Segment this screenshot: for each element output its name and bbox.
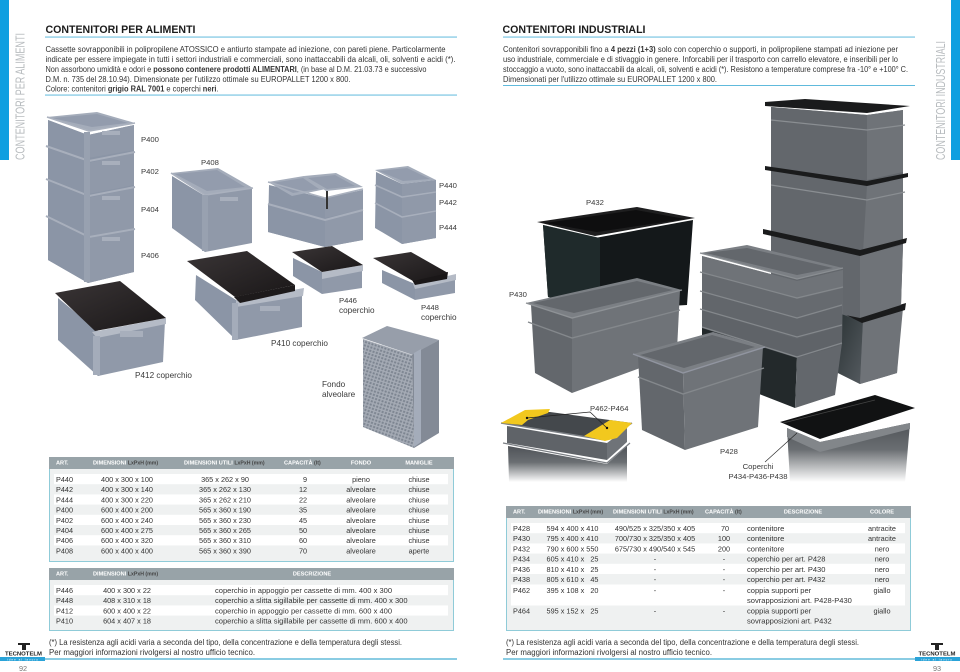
table: cassette: P442 xyxy=(56,485,73,494)
table: contenitori industriali: 594 x 400 x 410 xyxy=(547,524,598,533)
table: cassette: 9 xyxy=(303,475,307,484)
product labels: alimenti xyxy=(135,135,458,399)
table: cassette: 50 xyxy=(299,526,307,535)
intro text: alimenti: Cassette sovrapponibili in polipropilene ATOSSICO e antiurto stampate ad iniezione, con pareti piene. Particolarmente xyxy=(46,45,446,54)
product photo: P428 with black lid xyxy=(765,395,915,482)
table: cassette: DIMENSIONI LxPxH (mm) xyxy=(93,460,158,466)
product photo: P428 xyxy=(633,332,765,450)
table: cassette: alveolare xyxy=(346,516,376,525)
table: coperchi: 400 x 300 x 22 xyxy=(103,586,151,595)
side tab: right page xyxy=(933,0,960,160)
product photo: tall stack P432 with lids xyxy=(763,99,910,384)
table: cassette: 70 xyxy=(299,546,307,555)
product labels: alimenti: coperchio xyxy=(339,306,375,315)
table: cassette: MANIGLIE xyxy=(405,460,433,466)
product photo: P462-P464 yellow supports xyxy=(501,409,632,482)
table: contenitori industriali: giallo xyxy=(873,606,891,616)
intro text: alimenti: D.M. n. 735 del 28.10.94). Dimensionate per l'utilizzo ottimale su EUROPALLET 1200 x 800. xyxy=(46,75,350,84)
table: contenitori industriali: P430 xyxy=(513,534,530,543)
footnote: left page xyxy=(45,638,457,660)
table: contenitori industriali: - xyxy=(723,586,726,595)
product photo: P408 xyxy=(171,168,253,252)
table: contenitori industriali: contenitore xyxy=(747,534,784,543)
product labels: alimenti: P404 xyxy=(141,205,160,214)
table: cassette: 400 x 300 x 140 xyxy=(101,485,153,494)
table: contenitori industriali: COLORE xyxy=(870,510,894,516)
table: cassette: chiuse xyxy=(408,495,430,504)
table: contenitori industriali: nero xyxy=(875,555,889,564)
table: cassette: P402 xyxy=(56,516,73,525)
table: contenitori industriali: 200 xyxy=(718,544,730,553)
product labels: industriali: P462-P464 xyxy=(590,404,629,413)
table: coperchi: P410 xyxy=(56,617,73,626)
table: contenitori industriali: P438 xyxy=(513,575,530,584)
intro text: industriali: Contenitori sovrapponibili fino a 4 pezzi (1+3) solo con coperchio o supporti, in polipropilene stampati ad iniezione per xyxy=(503,45,898,54)
table: cassette xyxy=(49,457,454,562)
intro text: alimenti: Colore: contenitori grigio RAL 7001 e coperchi neri. xyxy=(46,84,218,94)
table: contenitori industriali: coppia supporti per xyxy=(747,586,812,595)
product photo: P410 with lid xyxy=(187,251,304,340)
table: coperchi: ART. xyxy=(56,572,69,578)
table: cassette: alveolare xyxy=(346,485,376,494)
table: contenitori industriali: P428 xyxy=(513,524,530,533)
side tab: left page xyxy=(0,0,28,160)
table: coperchi: 408 x 310 x 18 xyxy=(103,596,151,605)
product labels: alimenti: P400 xyxy=(141,135,159,144)
table: contenitori industriali: coperchio per art. P432 xyxy=(747,575,825,584)
logo: left page: TECNOTELM xyxy=(5,652,43,658)
table: contenitori industriali: P434 xyxy=(513,555,530,564)
table: cassette: 565 x 360 x 390 xyxy=(199,546,251,555)
product labels: alimenti: P446 xyxy=(339,296,357,305)
table: cassette: 45 xyxy=(299,516,307,525)
product photo: stack P440-P444 xyxy=(375,166,436,244)
table: contenitori industriali: - xyxy=(723,555,726,564)
table: cassette: DIMENSIONI UTILI LxPxH (mm) xyxy=(184,460,265,466)
product labels: alimenti: P402 xyxy=(141,167,159,176)
table: cassette: FONDO xyxy=(351,460,372,466)
product labels: alimenti: P444 xyxy=(439,223,458,232)
table: cassette: P444 xyxy=(56,495,73,504)
table: contenitori industriali: nero xyxy=(875,575,889,584)
table: contenitori industriali: DIMENSIONI LxPxH (mm) xyxy=(538,510,603,516)
table: contenitori industriali: 810 x 410 x 25 xyxy=(547,565,598,574)
table: coperchi: 604 x 407 x 18 xyxy=(103,617,151,626)
logo: right page: TECNOTELM xyxy=(918,652,956,658)
table: cassette: 565 x 360 x 190 xyxy=(199,506,251,515)
product labels: industriali: P428 xyxy=(720,447,738,456)
table: cassette: P406 xyxy=(56,536,73,545)
table: cassette: P440 xyxy=(56,475,73,484)
table: cassette: 600 x 400 x 320 xyxy=(101,536,153,545)
table: contenitori industriali: P436 xyxy=(513,565,530,574)
product photo: P430 xyxy=(526,278,682,393)
table: cassette: P404 xyxy=(56,526,73,535)
footnote: left page: (*) La resistenza agli acidi varia a seconda del tipo, della concentrazione e della temperatura degli stessi. xyxy=(49,638,402,647)
table: contenitori industriali: ART. xyxy=(513,510,526,516)
product photo: stack P428-P430 grey xyxy=(700,245,843,408)
product photo: P446 with lid xyxy=(292,246,363,294)
intro text: industriali: uso industriale, commerciale e di stivaggio in genere. Inforcabili per il trasporto con carrello elevatore, e inseribili per lo xyxy=(503,55,899,64)
logo: right page xyxy=(915,643,960,661)
table: coperchi: DESCRIZIONE xyxy=(293,572,331,578)
table: cassette: pieno xyxy=(352,475,370,484)
table: cassette: alveolare xyxy=(346,506,376,515)
table: cassette: chiuse xyxy=(408,536,430,545)
product labels: alimenti: alveolare xyxy=(322,390,356,399)
table: contenitori industriali: 595 x 152 x 25 xyxy=(547,606,598,616)
product labels: industriali: P430 xyxy=(509,290,527,299)
intro text: industriali xyxy=(503,37,915,86)
table: contenitori industriali: giallo xyxy=(873,586,891,595)
table: cassette: P408 xyxy=(56,546,73,555)
table: contenitori industriali: 490/525 x 325/350 x 405 xyxy=(615,524,695,533)
table: contenitori industriali: coperchio per art. P428 xyxy=(747,555,825,564)
table: cassette: 565 x 360 x 310 xyxy=(199,536,251,545)
product photo: P432 black xyxy=(537,207,695,310)
footnote: left page: Per maggiori informazioni rivolgersi al nostro ufficio tecnico. xyxy=(49,648,255,657)
table: coperchi: P448 xyxy=(56,596,73,605)
product photo: P448 with lid xyxy=(373,252,456,300)
table: contenitori industriali: antracite xyxy=(868,524,896,533)
table: cassette: alveolare xyxy=(346,495,376,504)
product labels: alimenti: P442 xyxy=(439,198,457,207)
table: contenitori industriali: sovrapposizioni art. P428-P430 xyxy=(747,596,852,605)
logo: left page: idee al lavoro xyxy=(7,657,39,661)
intro text: alimenti xyxy=(45,37,457,96)
table: contenitori industriali: P462 xyxy=(513,586,530,595)
table: coperchi: P412 xyxy=(56,606,73,615)
product labels: alimenti: P410 coperchio xyxy=(271,339,328,348)
logo: left page xyxy=(0,643,45,661)
footnote: right page xyxy=(503,638,915,660)
table: cassette: alveolare xyxy=(346,536,376,545)
table: cassette: alveolare xyxy=(346,546,376,555)
table: cassette: 600 x 400 x 240 xyxy=(101,516,153,525)
table: cassette: 22 xyxy=(299,495,307,504)
table: contenitori industriali: DIMENSIONI UTILI LxPxH (mm) xyxy=(613,510,694,516)
table: contenitori industriali: contenitore xyxy=(747,524,784,533)
table: coperchi: coperchio in appoggio per cassette di mm. 400 x 300 xyxy=(215,586,392,595)
product labels: alimenti: P408 xyxy=(201,158,219,167)
table: contenitori industriali: - xyxy=(654,555,657,564)
heading: contenitori industriali: CONTENITORI INDUSTRIALI xyxy=(502,24,646,36)
table: cassette: 600 x 400 x 200 xyxy=(101,506,153,515)
table: contenitori industriali: coppia supporti per xyxy=(747,606,812,616)
product labels: industriali: Coperchi xyxy=(743,462,774,471)
product photo: P410 base with half-size boxes xyxy=(268,173,363,247)
table: contenitori industriali: 675/730 x 490/540 x 545 xyxy=(615,544,695,553)
table: contenitori industriali: 700/730 x 325/350 x 405 xyxy=(615,534,695,543)
table: contenitori industriali: nero xyxy=(875,565,889,574)
table: cassette: P400 xyxy=(56,506,73,515)
table: cassette: 565 x 360 x 230 xyxy=(199,516,251,525)
heading: contenitori per alimenti: CONTENITORI PER ALIMENTI xyxy=(46,24,196,36)
table: contenitori industriali: - xyxy=(654,586,657,595)
table: contenitori industriali: 805 x 610 x 45 xyxy=(547,575,598,584)
intro text: industriali: stoccaggio a vuoto, sono inattaccabili da alcali, oli, solventi e acidi (*). Resistono a temperature comprese fra -10° e +100° C. xyxy=(503,65,908,74)
footnote: right page: (*) La resistenza agli acidi varia a seconda del tipo, della concentrazione e della temperatura degli stessi. xyxy=(506,638,859,647)
product labels: alimenti: Fondo xyxy=(322,380,346,389)
table: contenitori industriali: CAPACITÀ (lt) xyxy=(705,508,742,516)
table: contenitori industriali: contenitore xyxy=(747,544,784,553)
table: cassette: 400 x 300 x 100 xyxy=(101,475,153,484)
product photo: fondo alveolare xyxy=(362,326,439,448)
table: cassette: chiuse xyxy=(408,485,430,494)
table: contenitori industriali: coperchio per art. P430 xyxy=(747,565,825,574)
footnote: right page: Per maggiori informazioni rivolgersi al nostro ufficio tecnico. xyxy=(506,648,712,657)
product labels: industriali: P434-P436-P438 xyxy=(729,472,787,481)
table: contenitori industriali: 395 x 108 x 20 xyxy=(547,586,598,595)
table: cassette: 60 xyxy=(299,536,307,545)
table: coperchi: DIMENSIONI LxPxH (mm) xyxy=(93,572,158,578)
table: coperchi: 600 x 400 x 22 xyxy=(103,606,151,615)
table: contenitori industriali: antracite xyxy=(868,534,896,543)
product labels: alimenti: P412 coperchio xyxy=(135,371,192,380)
table: cassette: chiuse xyxy=(408,506,430,515)
product labels: alimenti: P440 xyxy=(439,181,457,190)
table: contenitori industriali: DESCRIZIONE xyxy=(784,510,822,516)
table: contenitori industriali: sovrapposizioni art. P432 xyxy=(747,616,832,626)
table: cassette: 400 x 300 x 220 xyxy=(101,495,153,504)
table: contenitori industriali: - xyxy=(654,606,657,616)
intro text: industriali: Dimensionati per l'utilizzo ottimale su EUROPALLET 1200 x 800. xyxy=(503,75,717,84)
product labels: industriali: P432 xyxy=(586,198,604,207)
table: contenitori industriali: - xyxy=(723,575,726,584)
table: contenitori industriali: - xyxy=(654,565,657,574)
table: cassette: 600 x 400 x 400 xyxy=(101,546,153,555)
intro text: alimenti: indicate per essere impiegate in tutti i settori industriali e commerciali, sono inattaccabili da alcali, oli, solventi e acidi (*). xyxy=(46,55,456,64)
product photo: stack P400-P406 xyxy=(46,112,135,283)
product labels: alimenti: P406 xyxy=(141,251,159,260)
table: cassette: 365 x 262 x 130 xyxy=(199,485,251,494)
table: contenitori industriali: 795 x 400 x 410 xyxy=(547,534,598,543)
table: contenitori industriali: P464 xyxy=(513,606,530,616)
table: cassette: ART. xyxy=(56,460,69,466)
table: cassette: 600 x 400 x 275 xyxy=(101,526,153,535)
intro text: alimenti: Non assorbono umidità e odori e possono contenere prodotti ALIMENTARI, (in base al D.M. 21.03.73 e successivo xyxy=(46,65,427,74)
table: cassette: 365 x 262 x 90 xyxy=(201,475,249,484)
product labels: alimenti: coperchio xyxy=(421,313,457,322)
table: cassette: chiuse xyxy=(408,526,430,535)
logo: right page: idee al lavoro xyxy=(921,657,953,661)
table: cassette: 12 xyxy=(299,485,307,494)
table: contenitori industriali: 790 x 600 x 550 xyxy=(547,544,598,553)
table: cassette: 365 x 262 x 210 xyxy=(199,495,251,504)
table: contenitori industriali: 100 xyxy=(718,534,730,543)
product photo: P412 with lid xyxy=(55,281,166,376)
table: cassette: aperte xyxy=(409,546,429,555)
table: cassette: 35 xyxy=(299,506,307,515)
table: coperchi: coperchio a slitta sigillabile per cassette di mm. 400 x 300 xyxy=(215,596,408,605)
table: cassette: CAPACITÀ (lt) xyxy=(284,460,321,466)
table: coperchi xyxy=(49,568,454,630)
table: cassette: chiuse xyxy=(408,475,430,484)
table: contenitori industriali: - xyxy=(723,565,726,574)
product labels: alimenti: P448 xyxy=(421,303,439,312)
product labels: industriali xyxy=(509,198,787,481)
table: contenitori industriali: nero xyxy=(875,544,889,553)
table: coperchi: coperchio in appoggio per cassette di mm. 600 x 400 xyxy=(215,606,392,615)
table: coperchi: P446 xyxy=(56,586,73,595)
table: coperchi: coperchio a slitta sigillabile per cassette di mm. 600 x 400 xyxy=(215,617,408,626)
table: contenitori industriali: - xyxy=(654,575,657,584)
table: cassette: alveolare xyxy=(346,526,376,535)
table: cassette: 565 x 360 x 265 xyxy=(199,526,251,535)
table: contenitori industriali: 70 xyxy=(721,524,729,533)
table: cassette: chiuse xyxy=(408,516,430,525)
table: contenitori industriali: P432 xyxy=(513,544,530,553)
table: contenitori industriali: 605 x 410 x 25 xyxy=(547,555,598,564)
table: contenitori industriali: - xyxy=(723,606,726,616)
table: contenitori industriali xyxy=(506,506,911,630)
